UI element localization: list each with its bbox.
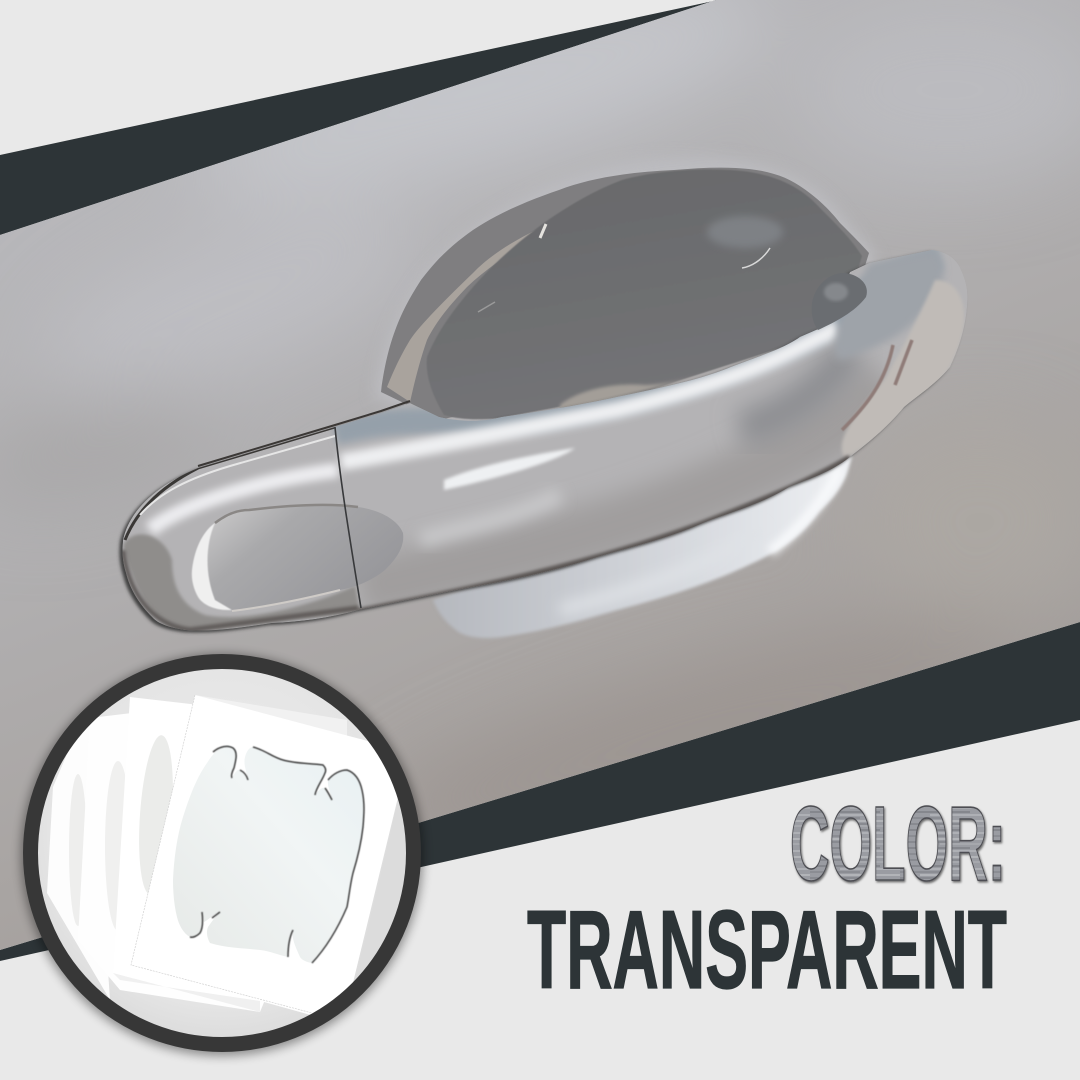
lower edge shadow: [358, 458, 850, 612]
handle top edge line: [198, 401, 410, 466]
blue top edge: [335, 258, 940, 432]
handle right end: [835, 250, 943, 360]
circle inset: sticker sheets: [30, 661, 420, 1045]
decal edge line: [190, 746, 364, 963]
left cap shading: [123, 534, 360, 632]
bottom dark diagonal band: [0, 622, 1080, 961]
lower finger cup: [433, 455, 852, 638]
back sheet top strip: [200, 696, 347, 736]
lower shading: [360, 385, 890, 590]
chrome reflection strip: [387, 232, 533, 402]
finger hole: [192, 505, 403, 611]
dark recess interior: [427, 169, 862, 419]
recess tan reflection: [558, 380, 676, 408]
cup rim: [381, 168, 869, 420]
handle seam: [335, 427, 361, 608]
front sticker sheet: [131, 695, 409, 1024]
key cylinder knob: [818, 274, 867, 330]
handle outline shadow: [119, 252, 964, 633]
highlight band: [341, 328, 838, 462]
cup halo: [374, 157, 878, 430]
sticker sheet 4 (rear): [47, 700, 110, 1000]
transparent door decal: [173, 745, 364, 963]
right sheet shadow: [370, 818, 396, 924]
circle inset shadow: [21, 654, 423, 1056]
upper cup recess: [374, 157, 878, 430]
sticker sheet 3: [78, 705, 260, 1012]
top dark diagonal band: [0, 0, 718, 235]
sticker sheet 2: [114, 697, 264, 1012]
circle ring: [30, 662, 414, 1044]
handle body: [122, 250, 967, 632]
